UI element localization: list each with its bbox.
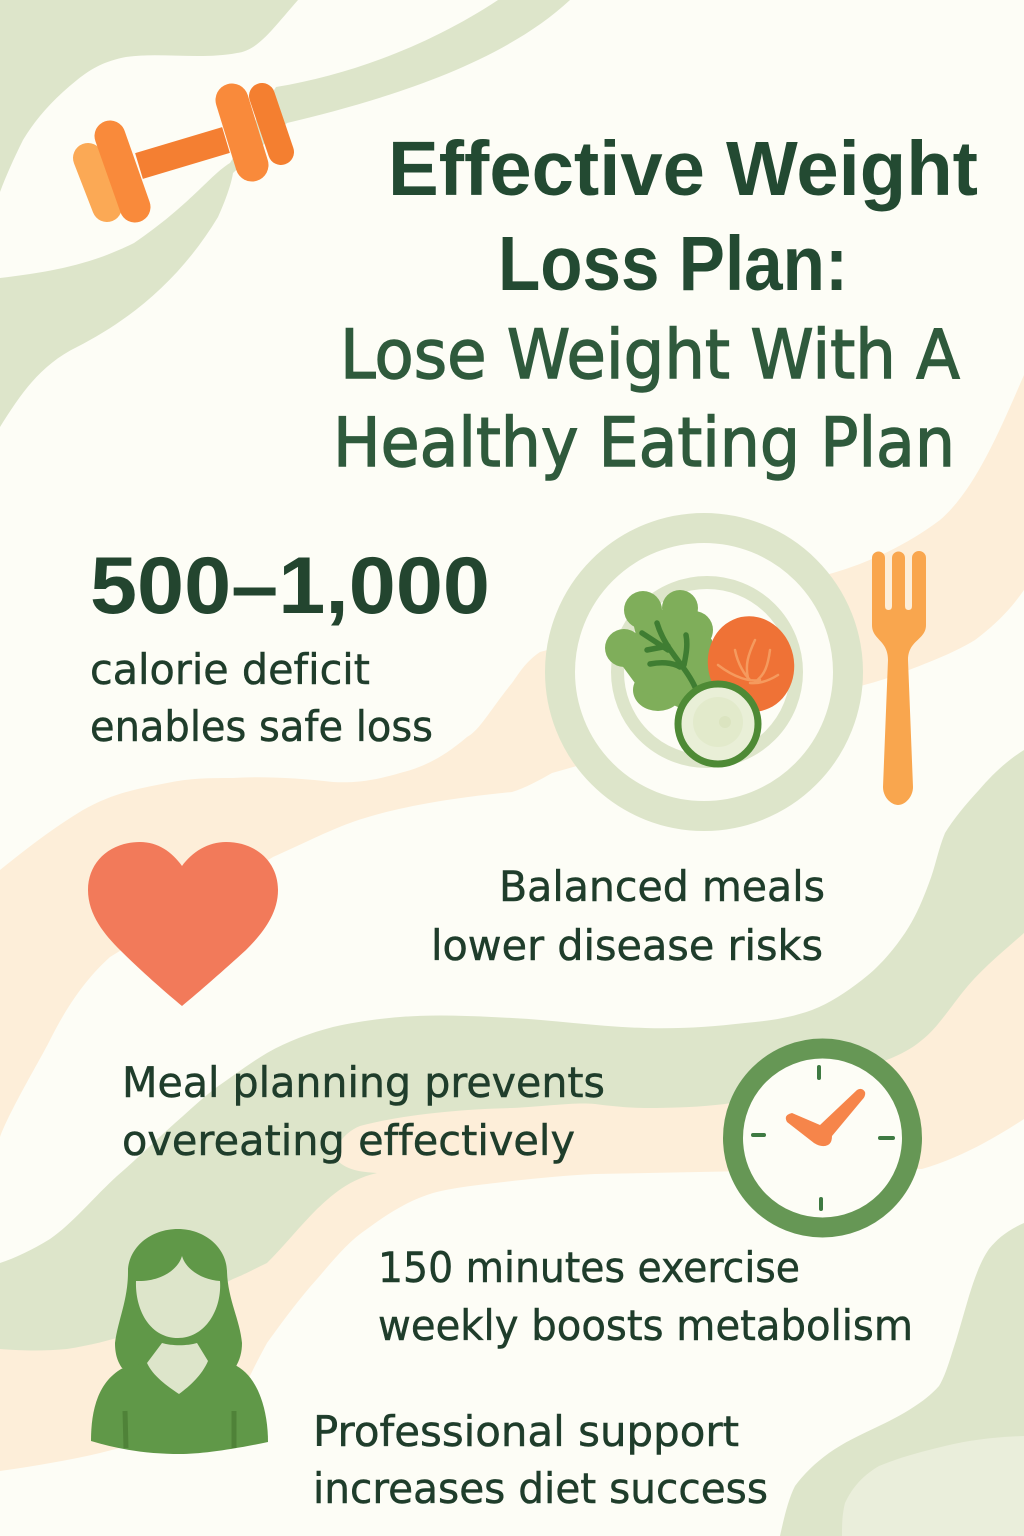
icon: dumbbell bbox=[88, 96, 281, 207]
text: balanced meals: Balanced meals bbox=[499, 862, 825, 911]
icon: person bbox=[91, 1229, 268, 1454]
title: Loss Plan: bbox=[498, 221, 848, 307]
title: Effective Weight bbox=[388, 126, 978, 212]
subtitle: Healthy Eating Plan bbox=[333, 404, 955, 483]
text: meal planning: Meal planning prevents bbox=[122, 1058, 605, 1107]
calorie deficit statistic: 500–1,000 bbox=[90, 541, 490, 631]
text: meal planning: overeating effectively bbox=[122, 1116, 575, 1165]
icon: heart bbox=[88, 842, 278, 1006]
text: meal planning bbox=[122, 1058, 605, 1165]
icon: plate with salad bbox=[560, 528, 848, 816]
calorie deficit statistic bbox=[90, 541, 490, 751]
text: exercise: weekly boosts metabolism bbox=[378, 1301, 913, 1350]
title bbox=[388, 126, 978, 307]
subtitle: Lose Weight With A bbox=[340, 316, 960, 395]
calorie deficit statistic: calorie deficit bbox=[90, 645, 370, 694]
text: balanced meals bbox=[431, 862, 825, 970]
clock hands bbox=[786, 1089, 865, 1146]
lettuce leaf bbox=[605, 590, 713, 711]
text: exercise: 150 minutes exercise bbox=[378, 1243, 800, 1292]
tomato slice bbox=[699, 608, 803, 720]
text: professional support: Professional support bbox=[313, 1407, 739, 1456]
text: professional support bbox=[313, 1407, 768, 1513]
icon: fork bbox=[872, 551, 926, 805]
text: professional support: increases diet success bbox=[313, 1464, 768, 1513]
icon: clock bbox=[733, 1048, 912, 1228]
subtitle bbox=[333, 316, 960, 483]
text: balanced meals: lower disease risks bbox=[431, 921, 823, 970]
cucumber slice bbox=[678, 684, 758, 764]
text: exercise bbox=[378, 1243, 913, 1350]
calorie deficit statistic: enables safe loss bbox=[90, 702, 433, 751]
